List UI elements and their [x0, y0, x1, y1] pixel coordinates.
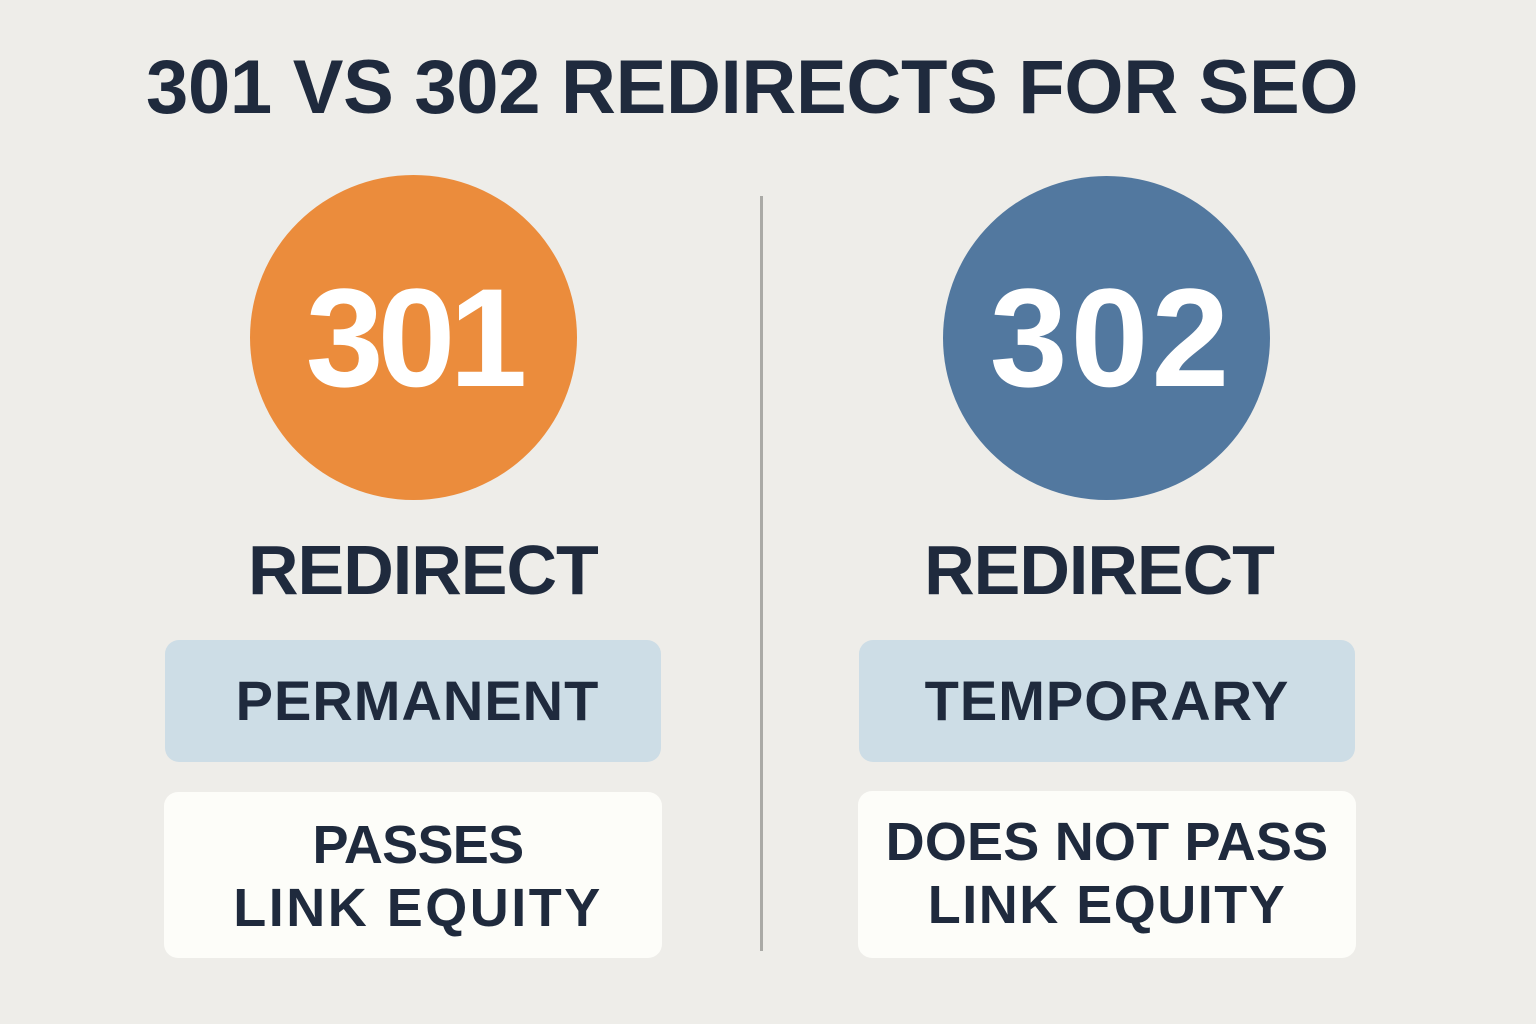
label box: temporary	[859, 640, 1355, 762]
badge number: 301: 301	[306, 259, 521, 416]
center divider	[760, 196, 763, 951]
info text: passes link equity: PASSES	[313, 815, 523, 875]
panel: 301 redirect	[164, 175, 662, 958]
info text: passes link equity: LINK EQUITY	[233, 878, 603, 938]
info text: passes link equity	[233, 815, 603, 938]
badge: 301 circle	[250, 175, 577, 500]
info text: does not pass link equity: LINK EQUITY	[928, 875, 1286, 935]
label box: permanent	[165, 640, 661, 762]
info text: does not pass link equity: DOES NOT PASS	[886, 812, 1328, 872]
heading: redirect: REDIRECT	[248, 531, 598, 609]
label text: temporary: TEMPORARY	[925, 669, 1289, 732]
title: 301 VS 302 REDIRECTS FOR SEO	[146, 45, 1358, 130]
info box: passes link equity	[164, 792, 662, 958]
info box: does not pass link equity	[858, 791, 1356, 958]
info text: does not pass link equity	[886, 812, 1328, 935]
label text: permanent: PERMANENT	[236, 669, 599, 732]
panel: 302 redirect	[858, 176, 1356, 958]
heading: redirect: REDIRECT	[924, 531, 1274, 609]
badge: 302 circle	[943, 176, 1270, 500]
badge number: 302: 302	[990, 259, 1232, 416]
